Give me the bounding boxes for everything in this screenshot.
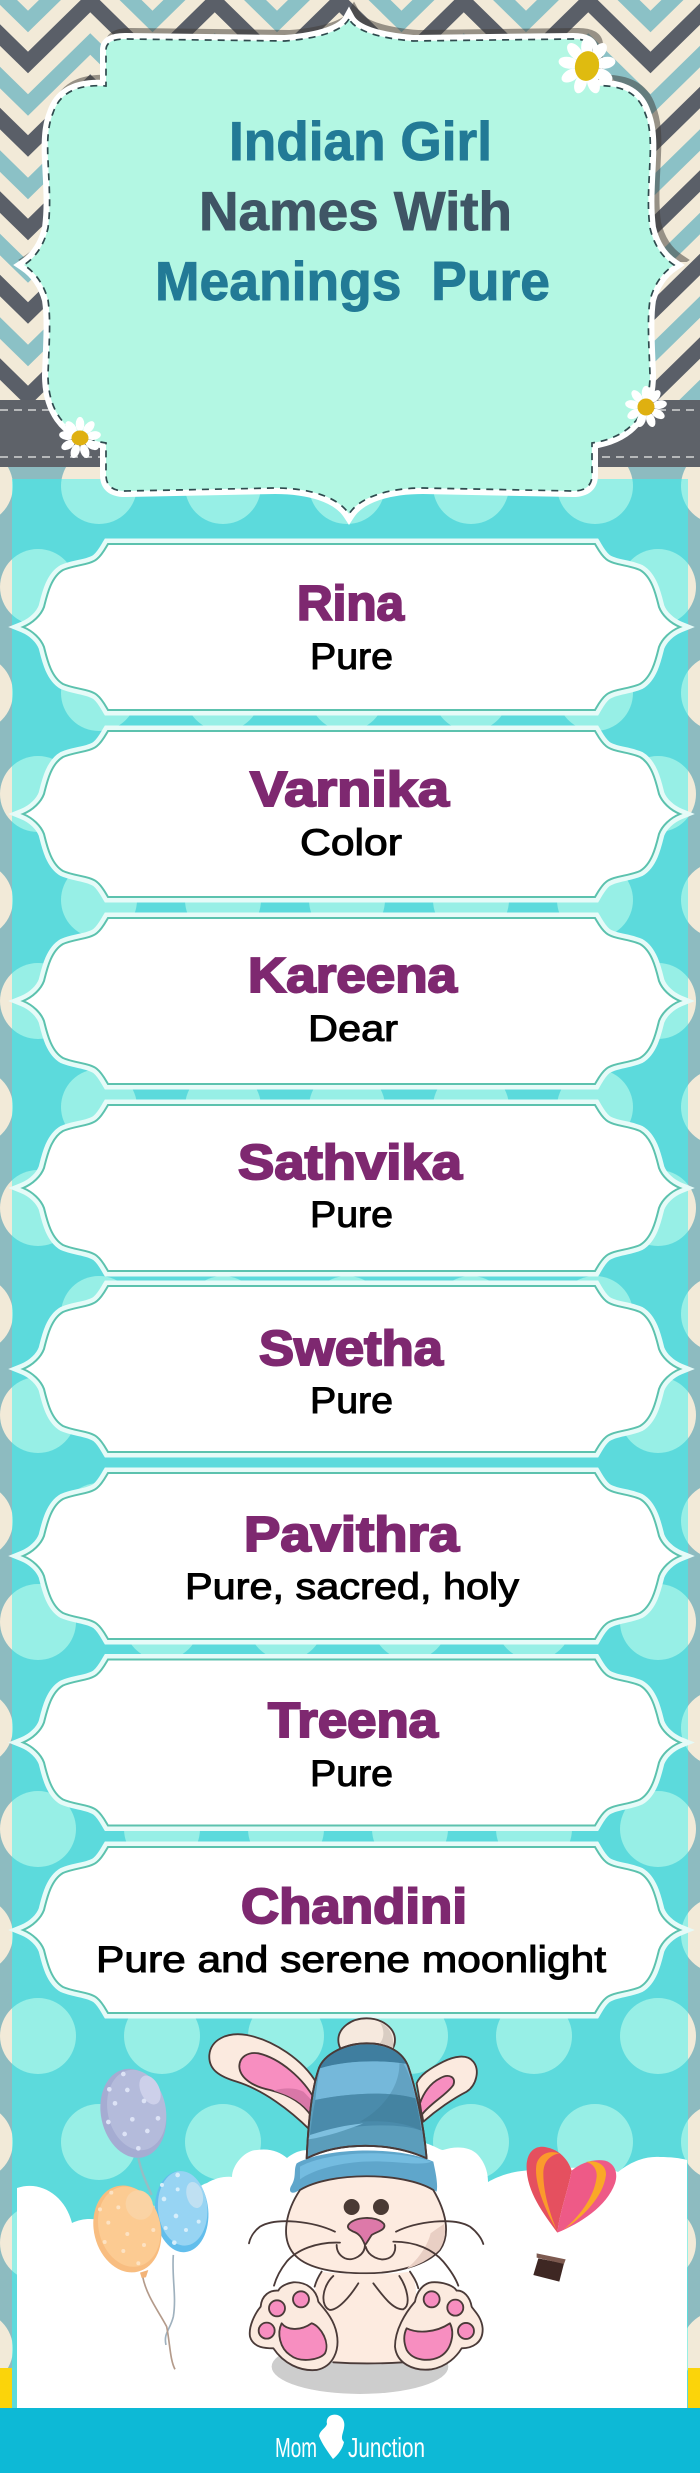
name: Rina bbox=[297, 577, 405, 631]
panel: name card Treena bbox=[23, 1660, 680, 1826]
logo: MomJunction: Mom bbox=[275, 2432, 317, 2463]
left ear bbox=[209, 2034, 317, 2130]
pom-pom bbox=[338, 2018, 395, 2062]
grey stitched band bbox=[0, 400, 700, 467]
panel: name card Sathvika bbox=[23, 1105, 680, 1271]
logo: MomJunction bbox=[275, 2415, 425, 2463]
icon: daisy bottom right bbox=[624, 386, 668, 428]
meaning: Pure bbox=[310, 636, 393, 677]
basket bbox=[533, 2253, 566, 2282]
name: Varnika bbox=[250, 763, 450, 817]
name: Pavithra bbox=[244, 1508, 460, 1562]
icon: daisy bottom left bbox=[58, 417, 102, 459]
panel: title plaque bbox=[24, 14, 679, 514]
name: Sathvika bbox=[238, 1136, 463, 1190]
whiskers bbox=[249, 2221, 483, 2286]
bunny illustration bbox=[209, 2018, 483, 2394]
mouth bbox=[337, 2245, 395, 2259]
footer bar bbox=[0, 2408, 700, 2473]
panel: name card Kareena bbox=[23, 918, 680, 1084]
chevron header background bbox=[0, 0, 700, 439]
nose bbox=[348, 2218, 384, 2245]
left foot bbox=[250, 2282, 337, 2370]
purple balloon bbox=[92, 2063, 174, 2195]
hot air heart balloon bbox=[527, 2147, 616, 2282]
shadow bbox=[272, 2339, 448, 2394]
title: Names With bbox=[199, 180, 512, 242]
meaning: Pure, sacred, holy bbox=[185, 1566, 520, 1607]
body bbox=[315, 2272, 418, 2364]
balloons bbox=[84, 2063, 212, 2369]
white cloud bbox=[17, 2143, 687, 2408]
meaning: Pure and serene moonlight bbox=[96, 1939, 607, 1980]
name: Swetha bbox=[259, 1322, 444, 1376]
title bbox=[155, 110, 550, 312]
icon: mother and child bbox=[319, 2415, 344, 2459]
name: Kareena bbox=[248, 949, 458, 1003]
title: Indian Girl bbox=[229, 110, 492, 172]
arms bbox=[323, 2276, 408, 2310]
panel: name card Varnika bbox=[23, 731, 680, 897]
panel: name card Chandini bbox=[23, 1847, 680, 2013]
name: Chandini bbox=[241, 1880, 467, 1934]
logo: MomJunction: Junction bbox=[348, 2432, 425, 2463]
hat brim bbox=[290, 2146, 437, 2193]
meaning: Pure bbox=[310, 1194, 393, 1235]
meaning: Color bbox=[300, 822, 402, 863]
meaning: Pure bbox=[310, 1380, 393, 1421]
orange balloon bbox=[84, 2178, 175, 2369]
right foot bbox=[395, 2282, 483, 2370]
eyes bbox=[344, 2199, 389, 2215]
blue balloon bbox=[152, 2169, 212, 2345]
icon: daisy top right bbox=[558, 37, 616, 95]
meaning: Dear bbox=[308, 1008, 398, 1049]
head bbox=[286, 2176, 446, 2273]
meaning: Pure bbox=[310, 1753, 393, 1794]
title: Meanings Pure bbox=[155, 250, 550, 312]
hat bbox=[307, 2043, 427, 2158]
panel: name card Pavithra bbox=[23, 1473, 680, 1639]
right ear bbox=[417, 2057, 477, 2122]
heart envelope bbox=[527, 2147, 616, 2233]
name: Treena bbox=[268, 1694, 439, 1748]
panel: name card Swetha bbox=[23, 1286, 680, 1452]
panel: name card Rina bbox=[23, 544, 680, 710]
